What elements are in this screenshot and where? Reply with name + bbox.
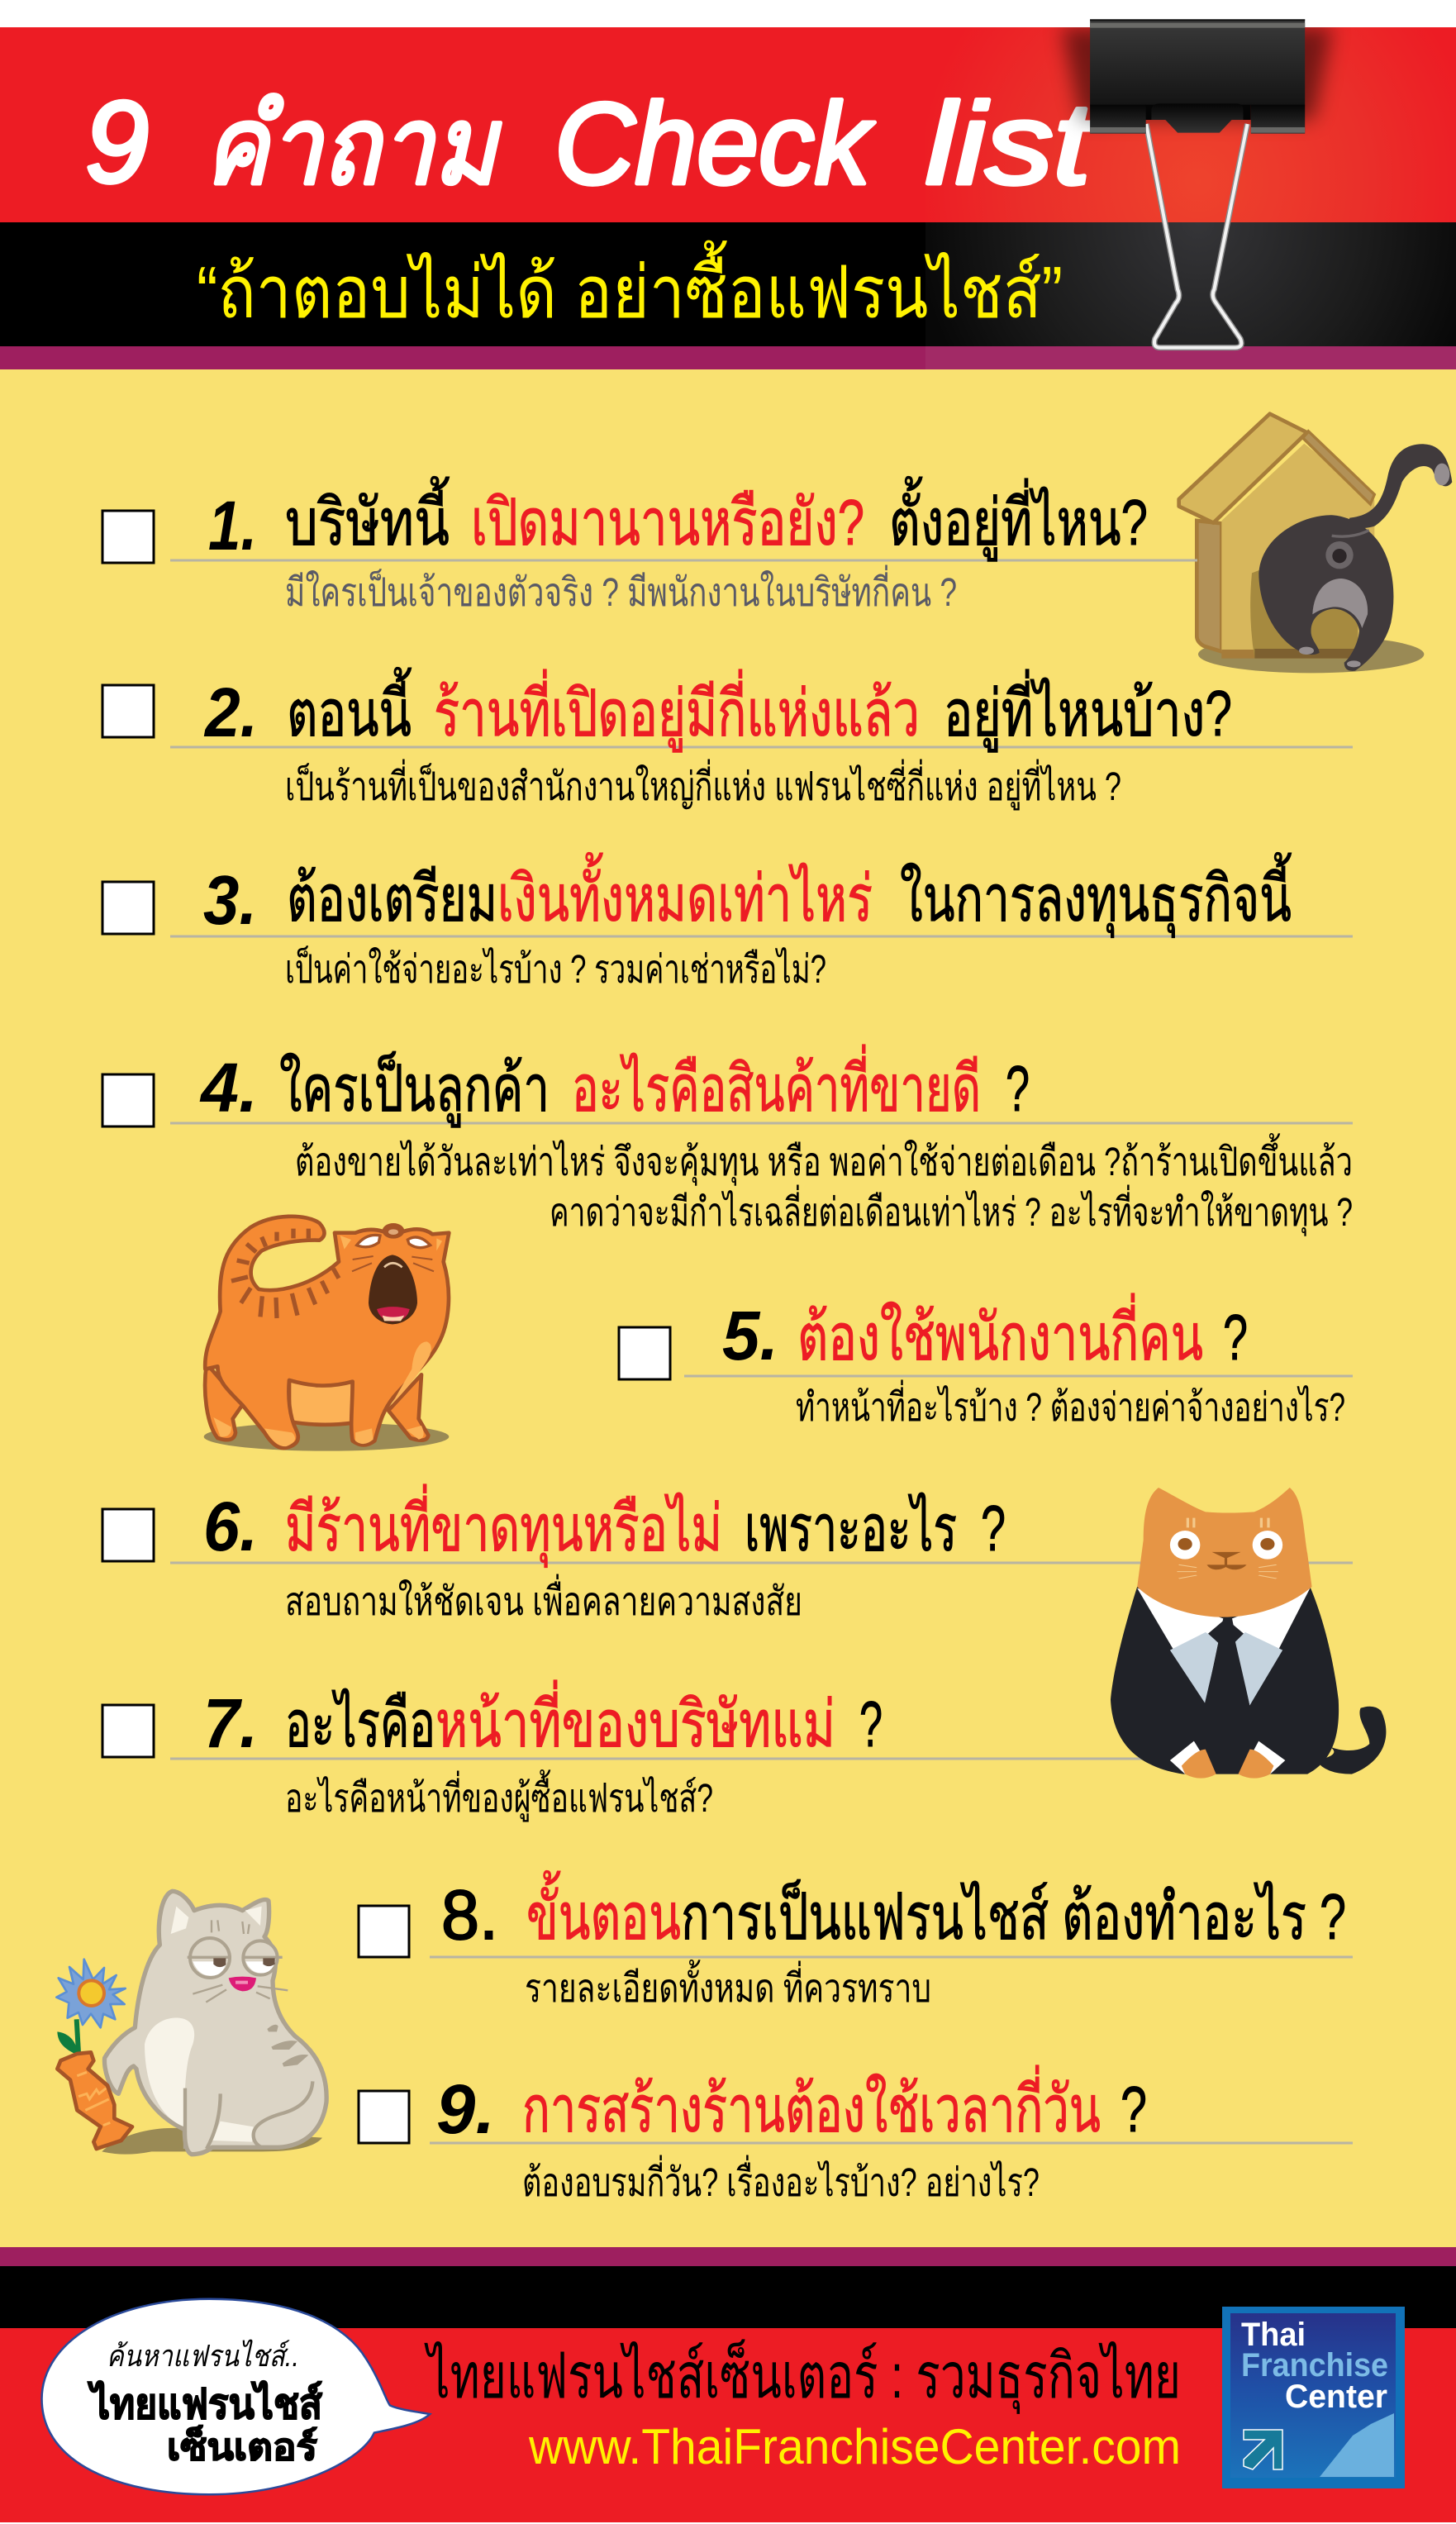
title	[85, 77, 1096, 208]
icon: binder clip	[1062, 0, 1332, 348]
title: Check	[554, 79, 875, 208]
subtitle: “ถ้าตอบไม่ได้ อย่าซื้อแฟรนไชส์”	[197, 240, 1063, 333]
logo: Thai	[1241, 2317, 1306, 2353]
question 7: ?	[859, 1688, 883, 1760]
title: คำถาม	[204, 85, 501, 207]
logo	[1222, 2307, 1405, 2488]
question 3: เงินทั้งหมดเท่าไหร่	[497, 852, 873, 935]
illustration: cat at dog house	[1179, 414, 1452, 673]
question 5: ?	[1223, 1301, 1248, 1374]
question 9: ?	[1121, 2073, 1147, 2145]
question 1: มีใครเป็นเจ้าของตัวจริง ? มีพนักงานในบริษัทกี่คน ?	[285, 564, 957, 615]
speech bubble	[42, 2299, 430, 2494]
question 5: ต้องใช้พนักงานกี่คน	[797, 1293, 1203, 1374]
question 8: ขั้นตอน	[526, 1870, 681, 1953]
question 9: ต้องอบรมกี่วัน? เรื่องอะไรบ้าง? อย่างไร?	[522, 2155, 1040, 2205]
question 2	[102, 667, 1353, 811]
logo: Franchise	[1241, 2347, 1388, 2384]
question 6: ?	[981, 1492, 1006, 1564]
title: 9	[85, 77, 149, 207]
question 4: ใครเป็นลูกค้า	[279, 1051, 550, 1127]
panel: header	[0, 27, 1456, 369]
question 4: 4.	[199, 1049, 258, 1126]
speech bubble: ค้นหาแฟรนไชส์..	[107, 2339, 299, 2373]
question 7: อะไรคือ	[285, 1688, 435, 1760]
footer heading: ไทยแฟรนไชส์เซ็นเตอร์ : รวมธุรกิจไทย	[424, 2339, 1181, 2414]
question 4: อะไรคือสินค้าที่ขายดี	[572, 1045, 981, 1125]
question 7: 7.	[203, 1684, 258, 1762]
title: list	[925, 79, 1096, 208]
illustration: gray cat with flower	[56, 1891, 326, 2155]
question 6: มีร้านที่ขาดทุนหรือไม่	[285, 1484, 722, 1568]
question 9	[359, 2065, 1353, 2205]
question 2: ร้านที่เปิดอยู่มีกี่แห่งแล้ว	[434, 669, 920, 752]
question 3	[102, 852, 1353, 992]
question 1: บริษัทนี้	[285, 476, 450, 559]
question 7: หน้าที่ของบริษัทแม่	[435, 1680, 835, 1760]
question 7	[102, 1680, 1157, 1822]
panel: footer	[0, 2247, 1456, 2522]
question 2: ตอนนี้	[287, 667, 412, 750]
question 6: สอบถามให้ชัดเจน เพื่อคลายความสงสัย	[285, 1574, 802, 1624]
question 3: เป็นค่าใช้จ่ายอะไรบ้าง ? รวมค่าเช่าหรือไม่?	[285, 945, 826, 992]
question 2: เป็นร้านที่เป็นของสำนักงานใหญ่กี่แห่ง แฟรนไชซี่กี่แห่ง อยู่ที่ไหน ?	[285, 759, 1121, 811]
illustration: orange cat	[204, 1217, 449, 1451]
question 6	[102, 1484, 1353, 1624]
question 1: 1.	[208, 487, 257, 564]
speech bubble: เซ็นเตอร์	[167, 2425, 317, 2468]
question 1: ตั้งอยู่ที่ไหน?	[889, 476, 1148, 561]
question 9: การสร้างร้านต้องใช้เวลากี่วัน	[522, 2065, 1101, 2145]
logo: Center	[1285, 2379, 1387, 2415]
question 9: 9.	[436, 2070, 495, 2148]
question 3: ต้องเตรียม	[287, 862, 497, 935]
question 2: 2.	[203, 674, 258, 751]
footer url: www.ThaiFranchiseCenter.com	[528, 2419, 1181, 2474]
question 2: อยู่ที่ไหนบ้าง?	[944, 669, 1232, 752]
question 6: 6.	[203, 1488, 258, 1565]
question 4	[102, 1045, 1353, 1236]
question 1	[102, 476, 1197, 615]
question 4: ?	[1006, 1052, 1030, 1125]
panel: yellow background	[0, 369, 1456, 2247]
question 5	[619, 1293, 1353, 1430]
question 8: รายละเอียดทั้งหมด ที่ควรทราบ	[525, 1960, 931, 2011]
question 6: เพราะอะไร	[745, 1492, 957, 1564]
question 8: 8.	[441, 1876, 498, 1954]
question 1: เปิดมานานหรือยัง?	[471, 486, 864, 559]
question 8	[359, 1870, 1353, 2011]
question 5: 5.	[722, 1297, 778, 1374]
question 7: อะไรคือหน้าที่ของผู้ซื้อแฟรนไชส์?	[285, 1769, 713, 1822]
question 3: ในการลงทุนธุรกิจนี้	[900, 852, 1292, 938]
speech bubble: ไทยแฟรนไชส์	[87, 2380, 322, 2427]
question 3: 3.	[203, 861, 257, 939]
illustration: cat in suit	[1111, 1488, 1386, 1779]
